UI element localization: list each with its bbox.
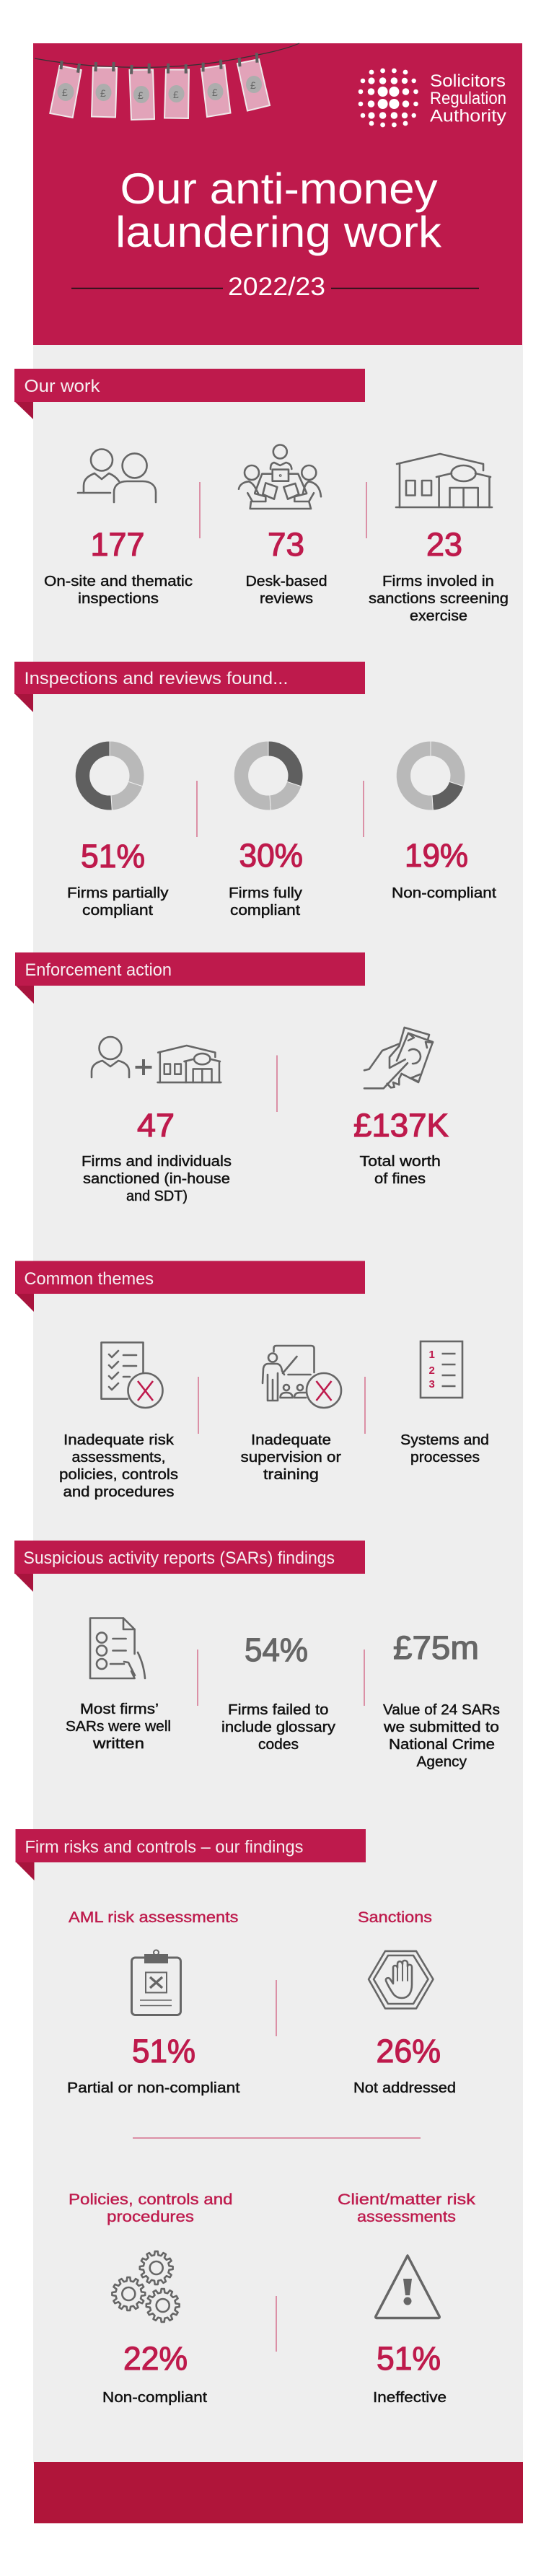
stat: 47 sanctioned: and SDT): [126, 1188, 188, 1204]
finding: £75m SARs value: Value of 24 SARs: [383, 1702, 500, 1718]
section: Firm risks and controls: [16, 1829, 476, 2406]
ribbon heading: Our work: [14, 369, 365, 419]
icon: clipboard with cross: [131, 1950, 180, 2015]
icon: checklist with cross: [101, 1342, 163, 1408]
finding: SARs well written: SARs were well: [66, 1719, 171, 1735]
finding: 54% glossary codes: codes: [258, 1737, 299, 1753]
stat: 177 inspections: 177: [91, 526, 144, 563]
finding: Policies, controls and procedures: procedures: [107, 2209, 194, 2225]
icon: two people: [78, 449, 156, 502]
ribbon heading: Suspicious activity reports (SARs) findings: [14, 1541, 365, 1592]
stat: £137K fines: [353, 1028, 449, 1187]
stat: 51% partially compliant: Firms partially: [67, 885, 169, 901]
finding: Sanctions: Sanctions: [358, 1909, 432, 1926]
theme: risk assessments: policies, controls: [59, 1467, 178, 1483]
stat: 51% partially compliant: 51%: [81, 838, 145, 875]
stat: 23 firms: sanctions screening: [369, 591, 509, 607]
finding: Sanctions: [353, 1909, 456, 2096]
stat: 23 firms: Firms involed in: [382, 574, 494, 590]
theme: risk assessments: assessments,: [72, 1450, 166, 1466]
stat: 73 reviews: reviews: [260, 591, 313, 607]
stat: 177 inspections: inspections: [78, 591, 159, 607]
icon: numbered list: 3: [428, 1378, 435, 1390]
title: laundering work: [115, 208, 442, 256]
stat: 73 reviews: Desk-based: [245, 574, 327, 590]
logo: Solicitors Regulation Authority: Authority: [430, 107, 506, 126]
logo: Solicitors Regulation Authority: Solicitors: [430, 71, 506, 91]
header panel: [33, 43, 522, 345]
stat: 47 sanctioned: Firms and individuals: [82, 1154, 232, 1170]
theme: systems and processes: Systems and: [400, 1432, 489, 1448]
icon: hand holding banknotes: [364, 1028, 433, 1088]
year with rules: 2022/23: [228, 273, 325, 301]
stat: 23 firms: [369, 454, 509, 624]
ribbon heading: Firm risks and controls – our findings: Firm risks and controls – our findings: [25, 1837, 303, 1857]
donut chart: 51%: [75, 741, 144, 810]
logo: Solicitors Regulation Authority: [359, 69, 506, 127]
icon: firm building: [396, 454, 492, 507]
finding: Client/matter risk assessments: Client/matter risk: [338, 2191, 476, 2208]
illustration: banknotes on a washing line: £: [100, 87, 106, 99]
stat: 19% non-compliant: [392, 741, 496, 901]
ribbon heading: Common themes: Common themes: [25, 1269, 154, 1289]
finding: AML risk assessments: AML risk assessments: [69, 1909, 238, 1926]
theme: supervision or training: training: [263, 1467, 319, 1483]
finding: £75m SARs value: [383, 1629, 500, 1770]
icon: trainer with cross: [263, 1346, 341, 1408]
finding: Sanctions: 26%: [377, 2033, 441, 2069]
theme: supervision or training: supervision or: [241, 1450, 341, 1466]
section: Common themes: [15, 1261, 489, 1500]
finding: Client/matter risk assessments: Ineffective: [373, 2390, 447, 2406]
stat: £137K fines: Total worth: [359, 1154, 441, 1170]
theme: risk assessments: Inadequate risk: [63, 1432, 175, 1448]
icon: three gears: [112, 2251, 180, 2322]
finding: Sanctions: Not addressed: [353, 2080, 456, 2096]
finding: SARs well written: [66, 1618, 171, 1752]
finding: 54% glossary codes: include glossary: [221, 1719, 335, 1735]
donut chart: 19%: [396, 741, 465, 810]
finding: 54% glossary codes: Firms failed to: [228, 1702, 329, 1718]
finding: AML risk assessments: [67, 1909, 240, 2096]
ribbon heading: Enforcement action: [15, 952, 365, 1004]
theme: systems and processes: [400, 1341, 489, 1466]
ribbon heading: Inspections and reviews found: [14, 662, 365, 712]
section: Our work: [14, 369, 509, 624]
ribbon heading: Inspections and reviews found: Inspections and reviews found...: [25, 669, 289, 688]
finding: SARs well written: Most firms’: [80, 1701, 159, 1717]
stat: 23 firms: 23: [426, 526, 462, 563]
section: Enforcement action: [15, 952, 449, 1204]
stat: 51% partially compliant: [67, 741, 169, 919]
stat: 19% non-compliant: Non-compliant: [392, 885, 496, 901]
finding: Policies, controls and procedures: 22%: [123, 2340, 188, 2377]
illustration: banknotes on a washing line: £: [212, 87, 218, 98]
title: Our anti-money: [120, 165, 437, 213]
icon: numbered list: 2: [428, 1364, 435, 1377]
donut chart: 30%: [234, 741, 303, 810]
finding: Policies, controls and procedures: Non-compliant: [102, 2390, 207, 2406]
ribbon heading: Enforcement action: Enforcement action: [25, 960, 172, 980]
illustration: banknotes on a washing line: £: [173, 89, 179, 100]
finding: Policies, controls and procedures: Policies, controls and: [69, 2191, 232, 2208]
icon: warning triangle: [376, 2256, 439, 2318]
logo: Solicitors Regulation Authority: Regulation: [430, 89, 506, 108]
section: SARs findings: [14, 1541, 500, 1770]
finding: £75m SARs value: we submitted to: [383, 1719, 499, 1735]
finding: £75m SARs value: National Crime: [389, 1737, 495, 1753]
stat: £137K fines: of fines: [374, 1171, 426, 1187]
ribbon heading: Firm risks and controls – our findings: [16, 1829, 366, 1880]
icon: stop hand in hexagon: [369, 1951, 433, 2009]
ribbon heading: Common themes: [15, 1261, 365, 1312]
stat: 177 inspections: On-site and thematic: [44, 574, 193, 590]
stat: 19% non-compliant: 19%: [405, 837, 468, 874]
stat: 30% fully compliant: 30%: [239, 837, 303, 874]
finding: £75m SARs value: £75m: [393, 1629, 479, 1666]
finding: AML risk assessments: 51%: [132, 2033, 195, 2069]
finding: Client/matter risk assessments: [338, 2191, 476, 2406]
finding: Client/matter risk assessments: assessments: [357, 2209, 456, 2225]
stat: 30% fully compliant: [229, 741, 303, 919]
stat: 73 reviews: 73: [268, 526, 304, 563]
ribbon heading: Our work: Our work: [25, 377, 101, 396]
stat: 23 firms: exercise: [410, 608, 467, 624]
stat: 73 reviews: [239, 444, 327, 607]
icon: numbered list: 1: [428, 1349, 435, 1361]
icon: person plus firm: [92, 1037, 221, 1082]
icon: numbered list: [421, 1341, 462, 1398]
icon: document with stars and hand: [90, 1618, 145, 1678]
illustration: banknotes on a washing line: [35, 43, 299, 120]
ribbon heading: Suspicious activity reports (SARs) findings: Suspicious activity reports (SARs) findings: [23, 1548, 335, 1568]
illustration: banknotes on a washing line: £: [250, 79, 256, 91]
illustration: banknotes on a washing line: £: [138, 89, 144, 101]
finding: SARs well written: written: [92, 1736, 144, 1752]
title: [115, 165, 442, 256]
theme: systems and processes: processes: [410, 1450, 480, 1466]
illustration: banknotes on a washing line: £: [62, 87, 68, 98]
icon: meeting around a table: [239, 444, 321, 509]
theme: risk assessments: and procedures: [63, 1484, 175, 1500]
theme: supervision or training: Inadequate: [251, 1432, 331, 1448]
stat: 177 inspections: [44, 449, 193, 607]
stat: 30% fully compliant: Firms fully: [229, 885, 302, 901]
finding: 54% glossary codes: 54%: [245, 1631, 308, 1668]
stat: 47 sanctioned: sanctioned (in-house: [83, 1171, 230, 1187]
stat: 47 sanctioned: [82, 1037, 232, 1204]
finding: Policies, controls and procedures: [69, 2191, 232, 2406]
theme: supervision or training: [241, 1346, 341, 1483]
theme: risk assessments: [59, 1342, 178, 1500]
stat: 30% fully compliant: compliant: [230, 903, 300, 919]
section: Inspections and reviews found: [14, 662, 496, 919]
footer band: [34, 2462, 523, 2523]
stat: 47 sanctioned: 47: [137, 1107, 175, 1144]
background panel: [33, 345, 523, 2463]
stat: £137K fines: £137K: [353, 1107, 449, 1144]
finding: 54% glossary codes: [221, 1631, 335, 1753]
finding: Client/matter risk assessments: 51%: [377, 2340, 441, 2377]
finding: AML risk assessments: Partial or non-compliant: [67, 2080, 240, 2096]
finding: £75m SARs value: Agency: [417, 1754, 467, 1770]
stat: 51% partially compliant: compliant: [82, 903, 153, 919]
